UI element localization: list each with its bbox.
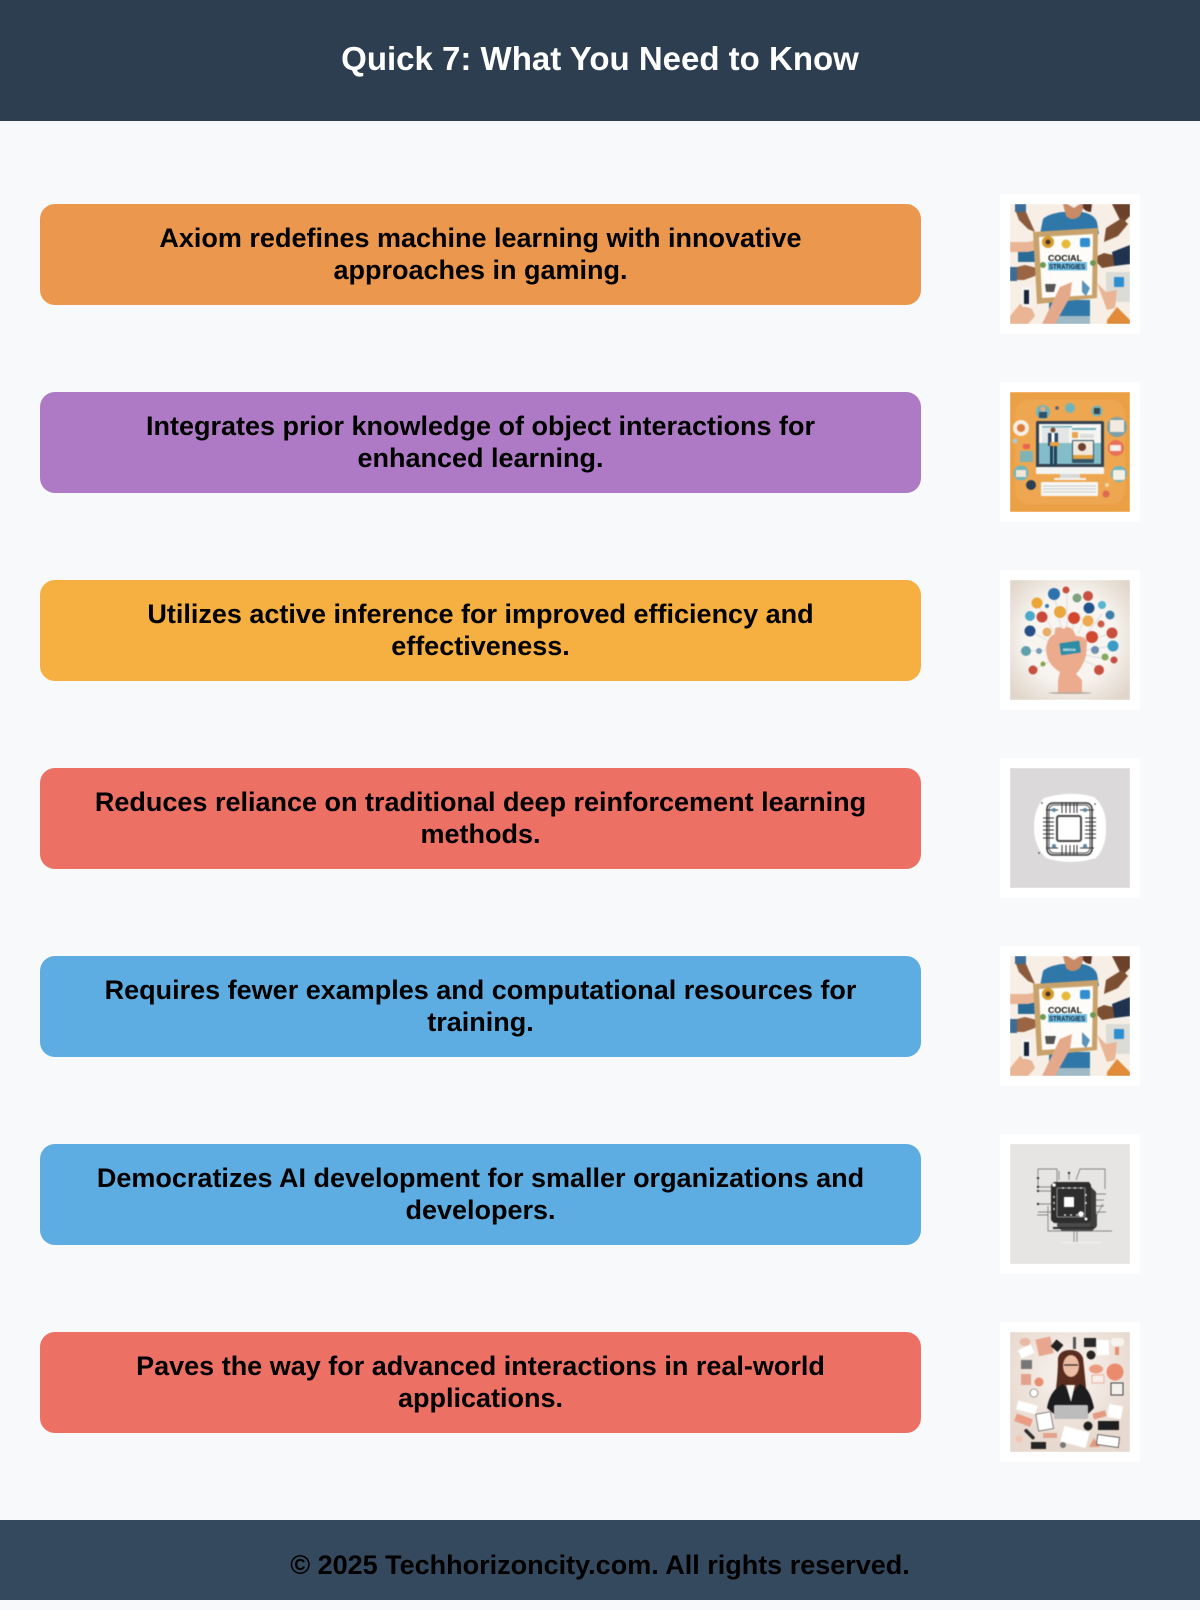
- bullet 6: [40, 1144, 921, 1245]
- bullet 2: [40, 392, 921, 493]
- bullet 4: Reduces reliance on traditional deep reinforcement learning: [95, 787, 866, 817]
- title: [0, 0, 1200, 121]
- footer: [0, 1520, 1200, 1600]
- image 7: businesswoman with laptop: [1000, 1322, 1140, 1462]
- footer: © 2025 Techhorizoncity.com. All rights reserved.: [290, 1550, 910, 1580]
- title: Quick 7: What You Need to Know: [341, 40, 859, 77]
- image 4: chip outline icon: [1000, 758, 1140, 898]
- bullet 4: [40, 768, 921, 869]
- bullet 2: enhanced learning.: [357, 443, 604, 473]
- bullet 2: Integrates prior knowledge of object interactions for: [146, 411, 815, 441]
- bullet 1: approaches in gaming.: [333, 255, 628, 285]
- image 5: social strategies board: [1000, 946, 1140, 1086]
- image 3: hand and social media icons: MEDIA: [1063, 647, 1076, 652]
- bullet 5: [40, 956, 921, 1057]
- bullet 7: Paves the way for advanced interactions in real-world: [136, 1351, 825, 1381]
- bullet 5: Requires fewer examples and computational resources for: [105, 975, 856, 1005]
- image 1: social strategies board: COCIAL: [1048, 254, 1082, 263]
- image 5: social strategies board: STRATIGIES: [1049, 1016, 1085, 1023]
- image 3: hand and social media icons: [1000, 570, 1140, 710]
- bullet 3: [40, 580, 921, 681]
- image 6: dark microchip: [1000, 1134, 1140, 1274]
- bullet 1: [40, 204, 921, 305]
- image 1: social strategies board: [1000, 194, 1140, 334]
- image 2: computer with social icons: [1000, 382, 1140, 522]
- bullet 4: methods.: [420, 819, 540, 849]
- bullet 1: Axiom redefines machine learning with innovative: [159, 223, 802, 253]
- bullet 3: effectiveness.: [391, 631, 570, 661]
- bullet 6: developers.: [405, 1195, 556, 1225]
- bullet 3: Utilizes active inference for improved efficiency and: [147, 599, 814, 629]
- image 1: social strategies board: STRATIGIES: [1049, 264, 1085, 271]
- image 5: social strategies board: COCIAL: [1048, 1006, 1082, 1015]
- bullet 6: Democratizes AI development for smaller organizations and: [97, 1163, 864, 1193]
- bullet 5: training.: [427, 1007, 534, 1037]
- bullet 7: applications.: [398, 1383, 563, 1413]
- bullet 7: [40, 1332, 921, 1433]
